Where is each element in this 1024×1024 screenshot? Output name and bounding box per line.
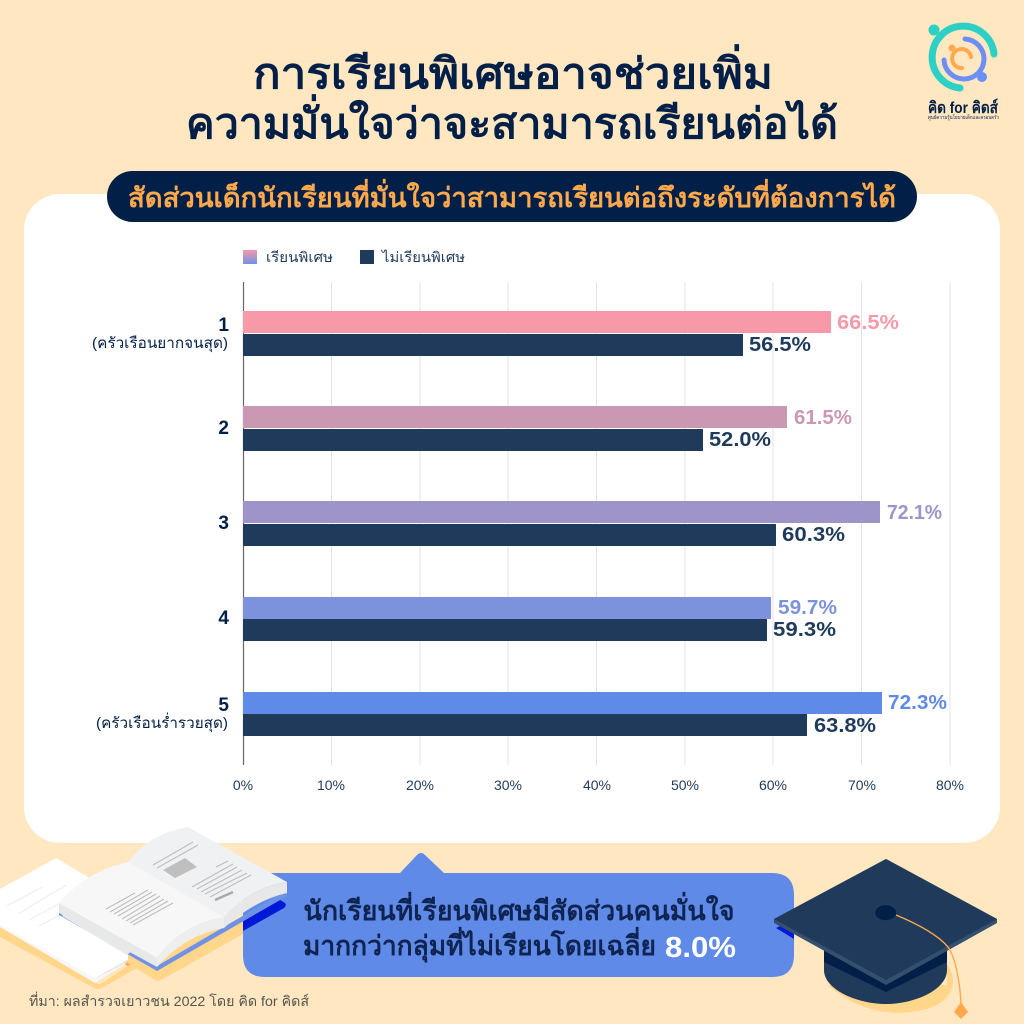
bars group 1: 66.5% [837, 312, 899, 334]
x axis labels: 40% [583, 777, 611, 793]
x axis labels: 70% [848, 777, 876, 793]
callout: 8.0% [665, 932, 736, 964]
legend [243, 249, 465, 265]
title [186, 44, 838, 147]
legend: เรียนพิเศษ [266, 249, 333, 265]
bars group 5 [243, 692, 947, 737]
bars group 4: 59.7% [778, 597, 837, 619]
bars group 3 [243, 501, 942, 546]
bar chart [92, 282, 964, 793]
x axis labels [233, 777, 964, 793]
x axis labels: 20% [406, 777, 434, 793]
bars group 1: 56.5% [749, 334, 811, 356]
legend: ไม่เรียนพิเศษ [381, 249, 465, 265]
logo [928, 24, 999, 121]
category labels: 3 [218, 513, 229, 534]
x axis labels: 80% [936, 777, 964, 793]
bars group 2 [243, 406, 852, 451]
x axis labels: 10% [317, 777, 345, 793]
category labels: (ครัวเรือนยากจนสุด) [92, 335, 228, 353]
callout [243, 853, 794, 977]
bars group 5: 63.8% [814, 715, 876, 737]
subtitle pill [107, 171, 917, 222]
logo: ศูนย์ความรู้นโยบายเด็กและครอบครัว [928, 113, 999, 121]
category labels: 5 [218, 695, 229, 716]
subtitle pill: สัดส่วนเด็กนักเรียนที่มั่นใจว่าสามารถเรียนต่อถึงระดับที่ต้องการได้ [128, 178, 896, 213]
x axis labels: 0% [233, 777, 253, 793]
bars group 1 [243, 311, 899, 356]
bars group 3: 72.1% [887, 502, 942, 524]
callout: นักเรียนที่เรียนพิเศษมีสัดส่วนคนมั่นใจ [304, 891, 734, 926]
category labels: 1 [218, 315, 229, 336]
title: ความมั่นใจว่าจะสามารถเรียนต่อได้ [186, 94, 838, 147]
category labels [92, 315, 229, 733]
title: การเรียนพิเศษอาจช่วยเพิ่ม [253, 44, 773, 97]
x axis labels: 60% [759, 777, 787, 793]
icon: open book [59, 827, 287, 980]
bars group 4 [243, 597, 837, 641]
callout: มากกว่ากลุ่มที่ไม่เรียนโดยเฉลี่ย [303, 926, 656, 963]
category labels: (ครัวเรือนร่ำรวยสุด) [96, 712, 228, 733]
bars group 3: 60.3% [782, 524, 845, 546]
panel: chart card [24, 194, 1000, 843]
icon: papers [0, 858, 137, 989]
icon: graduation cap [774, 859, 997, 1019]
logo: คิด for คิดส์ [928, 98, 998, 117]
category labels: 4 [218, 608, 229, 629]
x axis labels: 50% [671, 777, 699, 793]
bars group 4: 59.3% [773, 619, 836, 641]
bars group 5: 72.3% [888, 692, 947, 714]
bars group 2: 52.0% [709, 429, 771, 451]
x axis labels: 30% [494, 777, 522, 793]
bars group 2: 61.5% [794, 407, 852, 429]
category labels: 2 [218, 418, 229, 439]
source: ที่มา: ผลสำรวจเยาวชน 2022 โดย คิด for คิดส์ [29, 992, 309, 1009]
